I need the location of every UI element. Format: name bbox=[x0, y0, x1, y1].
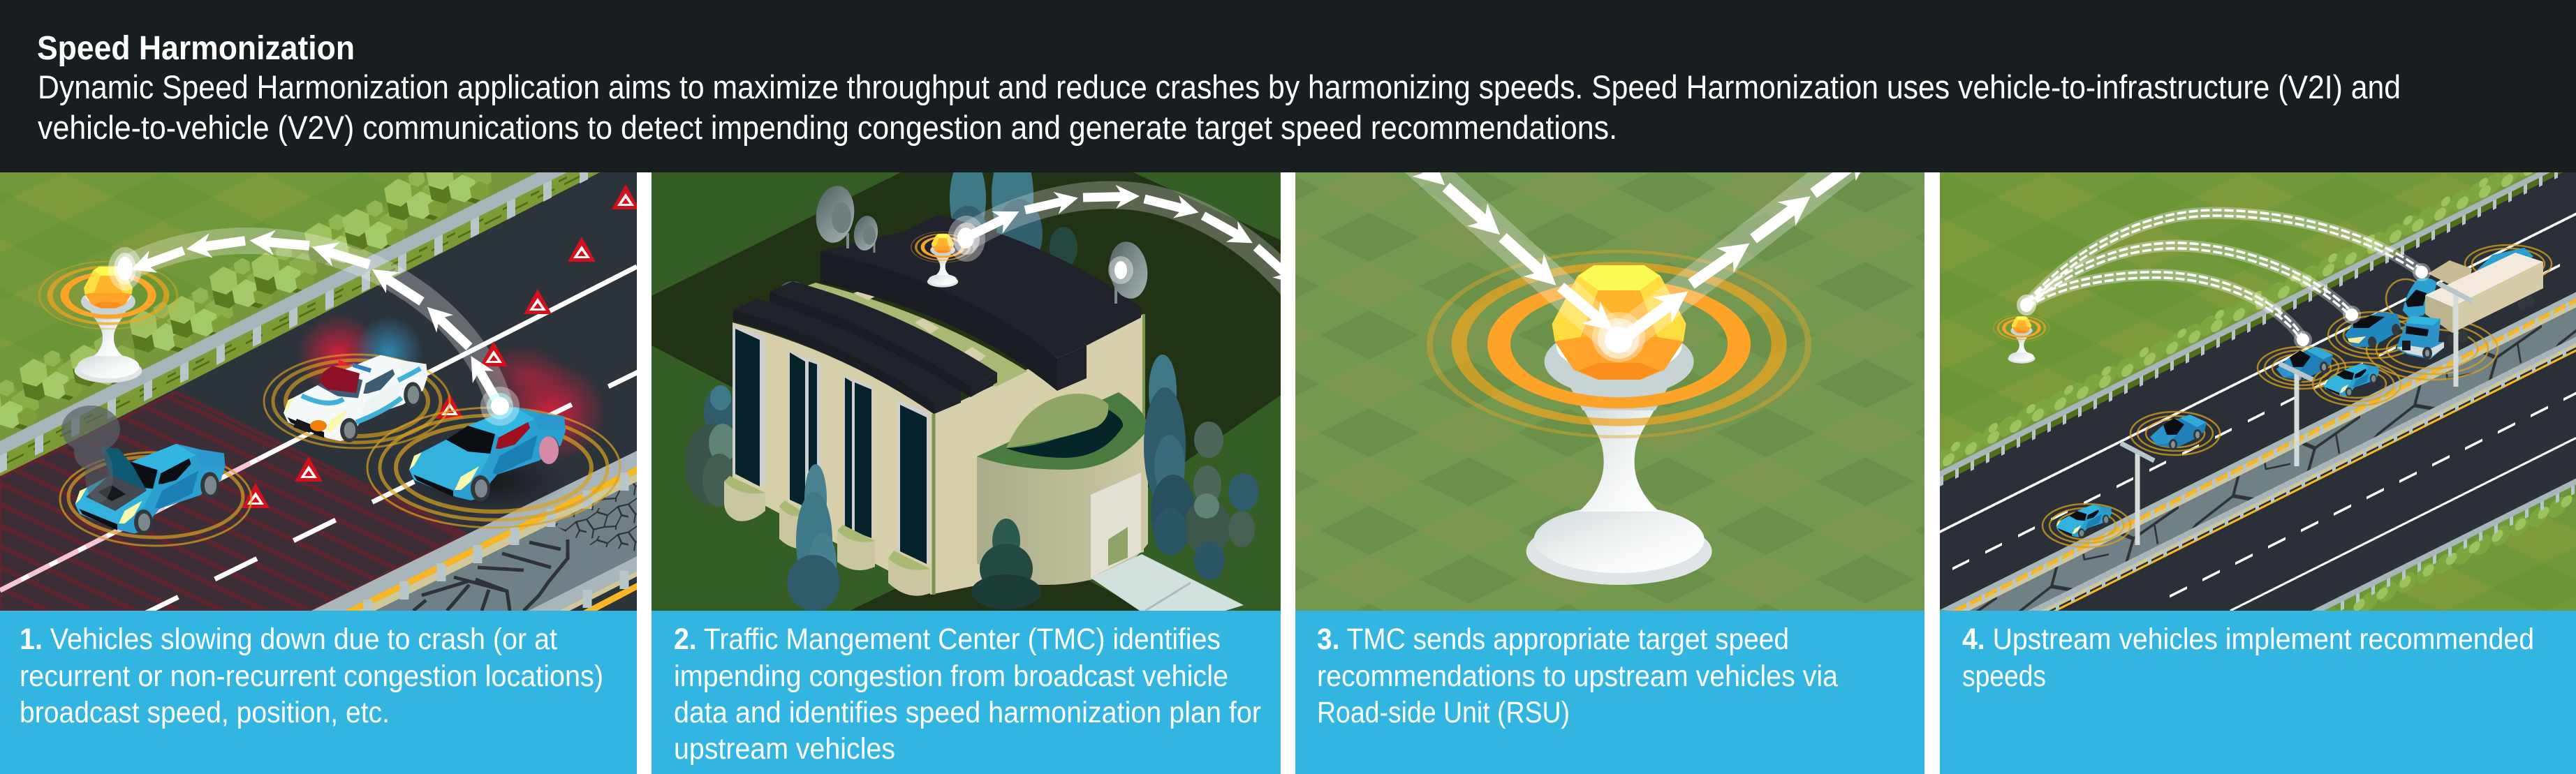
road surface bbox=[91, 172, 637, 533]
roadside vegetation bbox=[0, 172, 580, 463]
signal rings: crashed car bbox=[60, 452, 251, 546]
intro text: Dynamic Speed Harmonization application aims to maximize throughput and reduce crashes by harmonizing speeds. Speed Harmonization uses vehicle-to-infrastructure (V2I) and bbox=[38, 68, 2401, 105]
arrows in bbox=[1381, 126, 1622, 342]
intro text bbox=[38, 68, 2401, 146]
caption 2: impending congestion from broadcast vehicle bbox=[674, 660, 1228, 693]
central glow bbox=[1592, 312, 1645, 362]
roof bbox=[733, 215, 1141, 414]
caption 3: Road-side Unit (RSU) bbox=[1317, 696, 1570, 729]
panel 2: traffic management center illustration bbox=[652, 145, 1306, 611]
left shrubs bbox=[684, 385, 737, 507]
trailer bbox=[2425, 253, 2543, 346]
RSU beacon bbox=[39, 262, 177, 383]
arrow band bbox=[966, 195, 1292, 286]
glow at car bbox=[480, 387, 520, 426]
caption 2: upstream vehicles bbox=[674, 732, 895, 766]
highway strips bbox=[1940, 137, 2576, 611]
caption 1: recurrent or non-recurrent congestion locations) bbox=[20, 660, 603, 693]
police car bbox=[284, 355, 427, 442]
planters bbox=[724, 476, 930, 596]
arrows: car to RSU bbox=[133, 230, 500, 402]
light poles bbox=[2121, 283, 2473, 545]
panel 1: crash scene illustration bbox=[0, 144, 642, 618]
building walls bbox=[733, 322, 934, 595]
lower guard rail and median bbox=[311, 451, 637, 611]
signal rings: police car bbox=[264, 355, 450, 448]
signal rings: vehicles bbox=[2043, 245, 2552, 547]
caption 4 bbox=[1940, 611, 2576, 774]
minivan bbox=[2345, 312, 2401, 348]
windows bbox=[733, 324, 929, 565]
panel 4: highway with upstream vehicles illustration bbox=[1940, 137, 2576, 611]
left guard rail bbox=[0, 144, 594, 464]
signal rings: broadcasting car bbox=[367, 408, 620, 528]
caption 2: 2. Traffic Mangement Center (TMC) identifies bbox=[674, 623, 1221, 656]
lane markings bbox=[0, 267, 642, 618]
V2I arcs bbox=[2026, 210, 2422, 343]
RSU on roof bbox=[911, 232, 974, 288]
caption 3: 3. TMC sends appropriate target speed bbox=[1317, 623, 1789, 656]
caption 4: speeds bbox=[1962, 660, 2046, 693]
car behind truck bbox=[2403, 278, 2437, 318]
car behind trailer bbox=[2477, 248, 2533, 272]
entrance rotunda bbox=[977, 392, 1148, 585]
hazard triangles bbox=[242, 184, 640, 508]
foreground trees bbox=[787, 355, 1259, 611]
large RSU bbox=[1430, 251, 1809, 585]
caption 3 bbox=[1295, 611, 1924, 774]
caption 1: broadcast speed, position, etc. bbox=[20, 696, 390, 729]
hatched congestion zone bbox=[0, 392, 466, 611]
header band bbox=[0, 0, 2576, 172]
caption 1: 1. Vehicles slowing down due to crash (or at bbox=[20, 623, 557, 656]
title: Speed Harmonization bbox=[37, 30, 355, 67]
broadcasting car bbox=[409, 407, 566, 502]
arc end glows bbox=[2017, 263, 2431, 349]
arrows from RSU to upstream bbox=[961, 184, 1306, 293]
cars and pickups bbox=[2056, 347, 2379, 538]
caption 4: 4. Upstream vehicles implement recommended bbox=[1962, 623, 2534, 656]
crashed car with open hood bbox=[61, 405, 226, 535]
arrows out bbox=[1618, 140, 1880, 348]
glow bbox=[948, 216, 985, 262]
message arrow band bbox=[125, 241, 500, 406]
truck cab bbox=[2397, 315, 2444, 359]
emergency light glows bbox=[297, 314, 606, 462]
walkway bbox=[1091, 554, 1244, 611]
caption 3: recommendations to upstream vehicles via bbox=[1317, 660, 1838, 693]
caption 2: data and identifies speed harmonization plan for bbox=[674, 696, 1261, 729]
RSU beacon bbox=[1994, 314, 2049, 364]
satellite dishes bbox=[813, 184, 1151, 304]
back trees bbox=[777, 172, 1077, 304]
arrow bands bbox=[1411, 149, 1864, 342]
caption 2 bbox=[652, 611, 1281, 774]
caption 1 bbox=[0, 611, 637, 774]
panel 3: RSU close-up illustration bbox=[1295, 126, 1924, 611]
glow at RSU bbox=[108, 247, 142, 290]
intro text: vehicle-to-vehicle (V2V) communications to detect impending congestion and generate target speed recommendations. bbox=[38, 109, 1617, 146]
